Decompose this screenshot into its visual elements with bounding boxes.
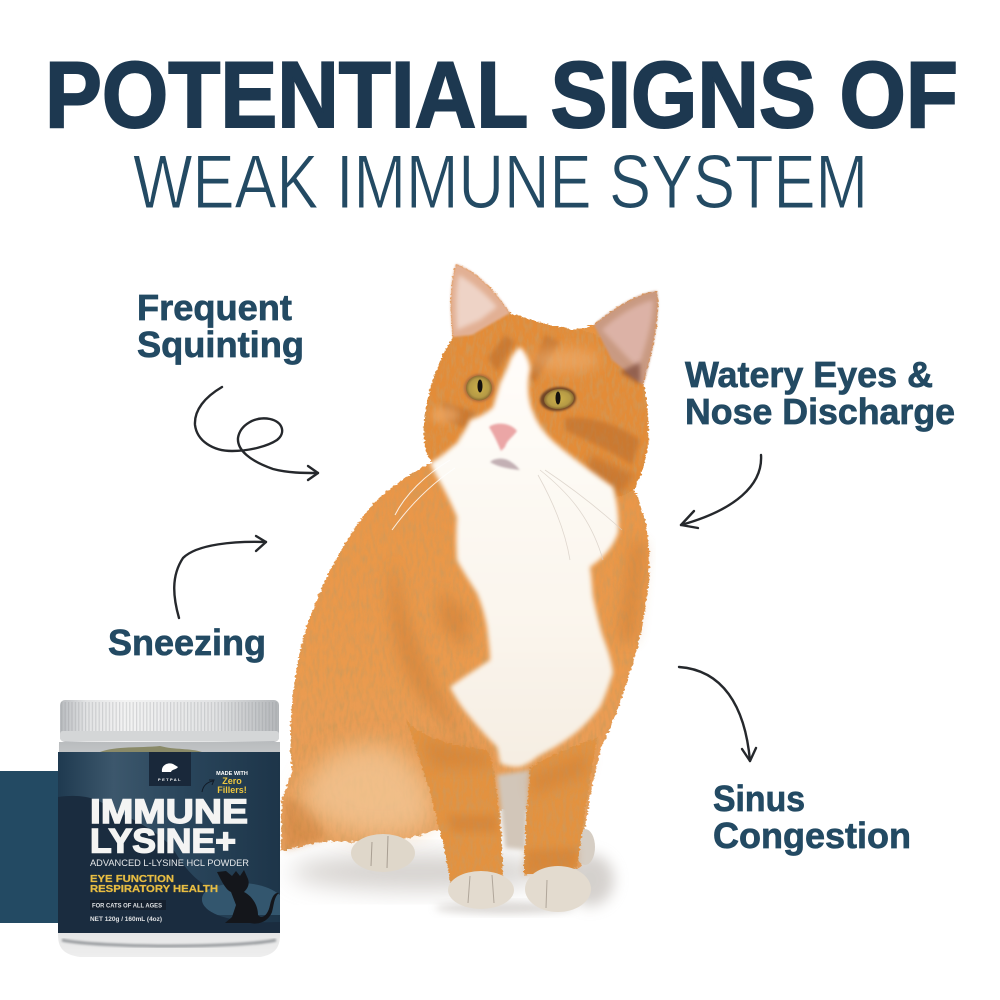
- front leg: left: [405, 718, 503, 882]
- zero fillers callout: [202, 771, 248, 795]
- age pill: FOR CATS OF ALL AGES: [92, 902, 163, 910]
- benefits: [90, 874, 218, 895]
- label: watery eyes and nose discharge: Nose Discharge: [685, 391, 955, 432]
- product name: LYSINE+: [90, 822, 236, 860]
- label: frequent squinting: [137, 287, 304, 365]
- front leg: right: [524, 738, 597, 875]
- paw: front right: [525, 866, 591, 912]
- jar lid: [60, 700, 279, 742]
- ear: left: [451, 264, 510, 337]
- age pill: [90, 900, 166, 910]
- pale highlights on head: [431, 348, 600, 423]
- far paw: [575, 829, 595, 865]
- zero fillers callout: MADE WITH: [216, 771, 248, 777]
- teal panel behind product: [0, 771, 60, 923]
- leg stripes: [420, 738, 590, 875]
- arrow: frequent squinting: [195, 387, 318, 480]
- brand box: PETPAL: [158, 777, 182, 782]
- label: sinus congestion: Sinus: [713, 778, 805, 819]
- pale haunch highlight: [300, 744, 433, 835]
- back paw: [351, 834, 415, 872]
- benefits: EYE FUNCTION: [90, 874, 174, 885]
- powder inside jar: [100, 746, 202, 752]
- ear: right: [594, 291, 658, 385]
- white blaze, muzzle and chest: [430, 347, 618, 767]
- brown tabby stripes on face: [442, 335, 640, 495]
- label: frequent squinting: Squinting: [137, 324, 304, 365]
- benefits: RESPIRATORY HEALTH: [90, 884, 218, 895]
- cat photo illustration: [281, 264, 658, 914]
- cat body fur: [281, 264, 658, 885]
- label: frequent squinting: Frequent: [137, 287, 292, 328]
- label: sinus congestion: Congestion: [713, 815, 911, 856]
- brand box: [149, 752, 191, 786]
- label: sinus congestion: [713, 778, 911, 856]
- cat silhouette: [217, 870, 279, 924]
- jar label: [58, 752, 280, 933]
- label: watery eyes and nose discharge: Watery Eyes &: [685, 354, 933, 395]
- eye: left: [464, 374, 494, 402]
- zero fillers callout: Fillers!: [217, 785, 247, 795]
- darker fur bands: [285, 540, 645, 850]
- nose and mouth: [489, 424, 520, 470]
- lighter wave behind cat: [195, 883, 280, 915]
- subtitle: weak immune system: WEAK IMMUNE SYSTEM: [133, 140, 868, 225]
- arrow: watery eyes: [681, 455, 761, 528]
- label: watery eyes and nose discharge: [685, 354, 955, 432]
- product descriptor: ADVANCED L-LYSINE HCL POWDER: [90, 858, 250, 868]
- eye: right: [539, 385, 577, 413]
- orange head: [424, 313, 648, 508]
- label: sneezing: Sneezing: [108, 622, 266, 663]
- gap between legs: [497, 770, 530, 850]
- zero fillers callout: Zero: [222, 776, 242, 786]
- arrow: sneezing: [174, 536, 266, 618]
- dark wave: [58, 796, 280, 933]
- net weight: NET 120g / 160mL (4oz): [90, 917, 162, 923]
- floor shadow: [290, 854, 614, 914]
- arrow: sinus congestion: [679, 667, 756, 761]
- paw: front left: [448, 871, 514, 909]
- product name: IMMUNE: [90, 793, 248, 831]
- whiskers: [392, 460, 455, 530]
- product jar: [58, 700, 280, 957]
- jar glass: [58, 742, 280, 957]
- product name: [90, 793, 248, 860]
- jar bottom reflection: [62, 940, 276, 946]
